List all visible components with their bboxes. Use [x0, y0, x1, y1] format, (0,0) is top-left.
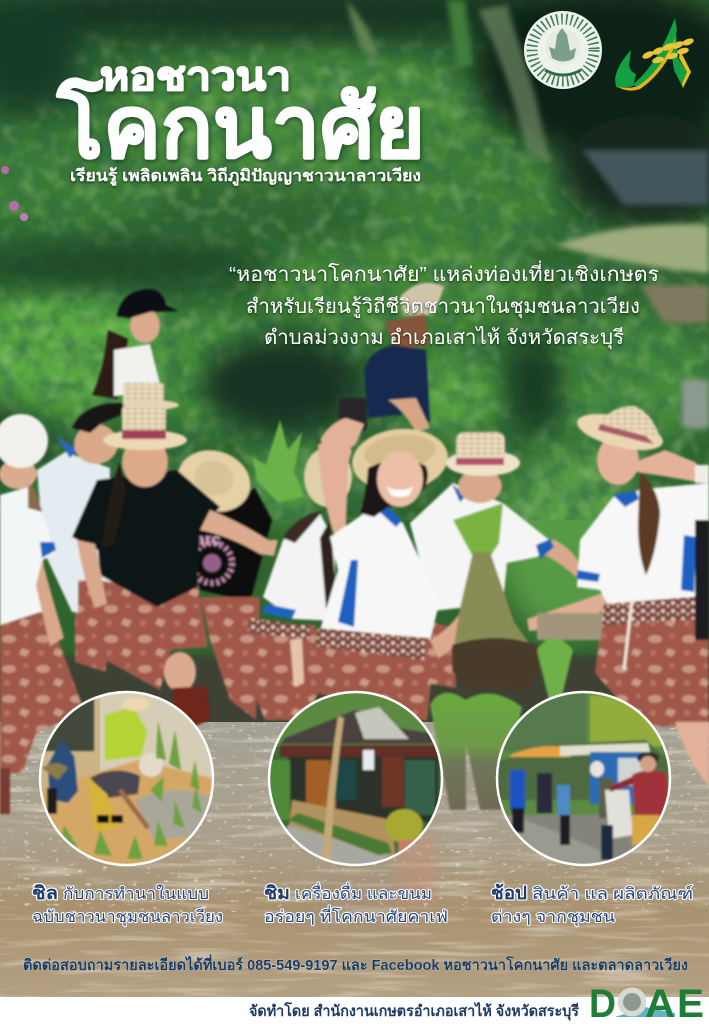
intro quote: ตำบลม่วงงาม อำเภอเสาไห้ จังหวัดสระบุรี	[264, 326, 624, 350]
caption: shop: ช้อป	[491, 883, 527, 903]
title: โคกนาศัย	[56, 77, 425, 176]
caption: chill: ชิล	[32, 883, 58, 903]
caption: taste: อร่อยๆ ที่โคกนาศัยคาเฟ่	[264, 905, 448, 926]
caption: chill	[32, 883, 223, 927]
footer band	[0, 997, 709, 1024]
dark canopy shadows	[0, 0, 709, 475]
intro quote	[229, 260, 659, 350]
person: man bending, white polo	[37, 403, 126, 672]
flower print: Marc	[181, 530, 221, 549]
person: woman in black with flower print	[170, 441, 272, 720]
person: selfie woman, centre	[312, 398, 476, 721]
person: woman with cap, left edge	[0, 414, 82, 814]
background photo: foliage	[0, 0, 709, 760]
caption: shop	[491, 883, 693, 927]
caption: shop: สินค้า แล ผลิตภัณฑ์	[532, 884, 693, 903]
bamboo table	[537, 613, 603, 640]
caption: taste: ชิม	[264, 883, 290, 903]
person: woman in white polo behind	[243, 447, 352, 720]
caption: chill: ฉบับชาวนาชุมชนลาวเวียง	[32, 908, 223, 927]
organiser credit: จัดทำโดย สำนักงานเกษตรอำเภอเสาไห้ จังหวัดสระบุรี	[249, 1001, 580, 1021]
photo circle: community market	[496, 691, 671, 866]
group of tourists in rice paddy	[0, 283, 709, 814]
person: woman with black cap	[92, 289, 179, 410]
title: หอชาวนา	[100, 55, 291, 99]
background photo: muddy paddy water	[0, 655, 709, 997]
caption: taste: เครื่องดื่ม และขนม	[295, 882, 432, 903]
caption: shop: ต่างๆ จากชุมชน	[491, 909, 615, 927]
person: woman in black shirt and straw hat	[72, 405, 278, 734]
photo circle: Khok Na Sai cafe	[268, 691, 445, 870]
foliage texture	[0, 0, 709, 520]
rice seedling clumps	[430, 638, 573, 810]
flower print	[181, 530, 232, 583]
rice seedling bundle	[452, 503, 541, 691]
logo: green A with rice ear	[615, 18, 695, 91]
foliage highlights	[0, 0, 709, 520]
logo: Department of Agriculture seal	[524, 11, 602, 89]
person: man in navy shirt	[364, 283, 444, 432]
person: peace-sign woman, right	[527, 406, 709, 787]
logo: DOAE	[589, 982, 704, 1024]
intro quote: สำหรับเรียนรู้วิถีชีวิตชาวนาในชุมชนลาวเวียง	[246, 295, 640, 319]
intro quote: “หอชาวนาโคกนาศัย” แหล่งท่องเที่ยวเชิงเกษตร	[229, 260, 659, 286]
person: woman holding rice bundle, back	[410, 432, 580, 688]
caption: chill: กับการทำนาในแบบ	[63, 884, 209, 903]
subtitle: เรียนรู้ เพลิดเพลิน วิถีภูมิปัญญาชาวนาลาวเวียง	[70, 166, 421, 187]
caption: taste	[264, 882, 448, 926]
contact line: ติดต่อสอบถามรายละเอียดได้ที่เบอร์ 085-549-9197 และ Facebook หอชาวนาโคกนาศัย และตลาดลาวเวียง	[23, 954, 688, 974]
photo circle: rice planting	[39, 691, 219, 866]
